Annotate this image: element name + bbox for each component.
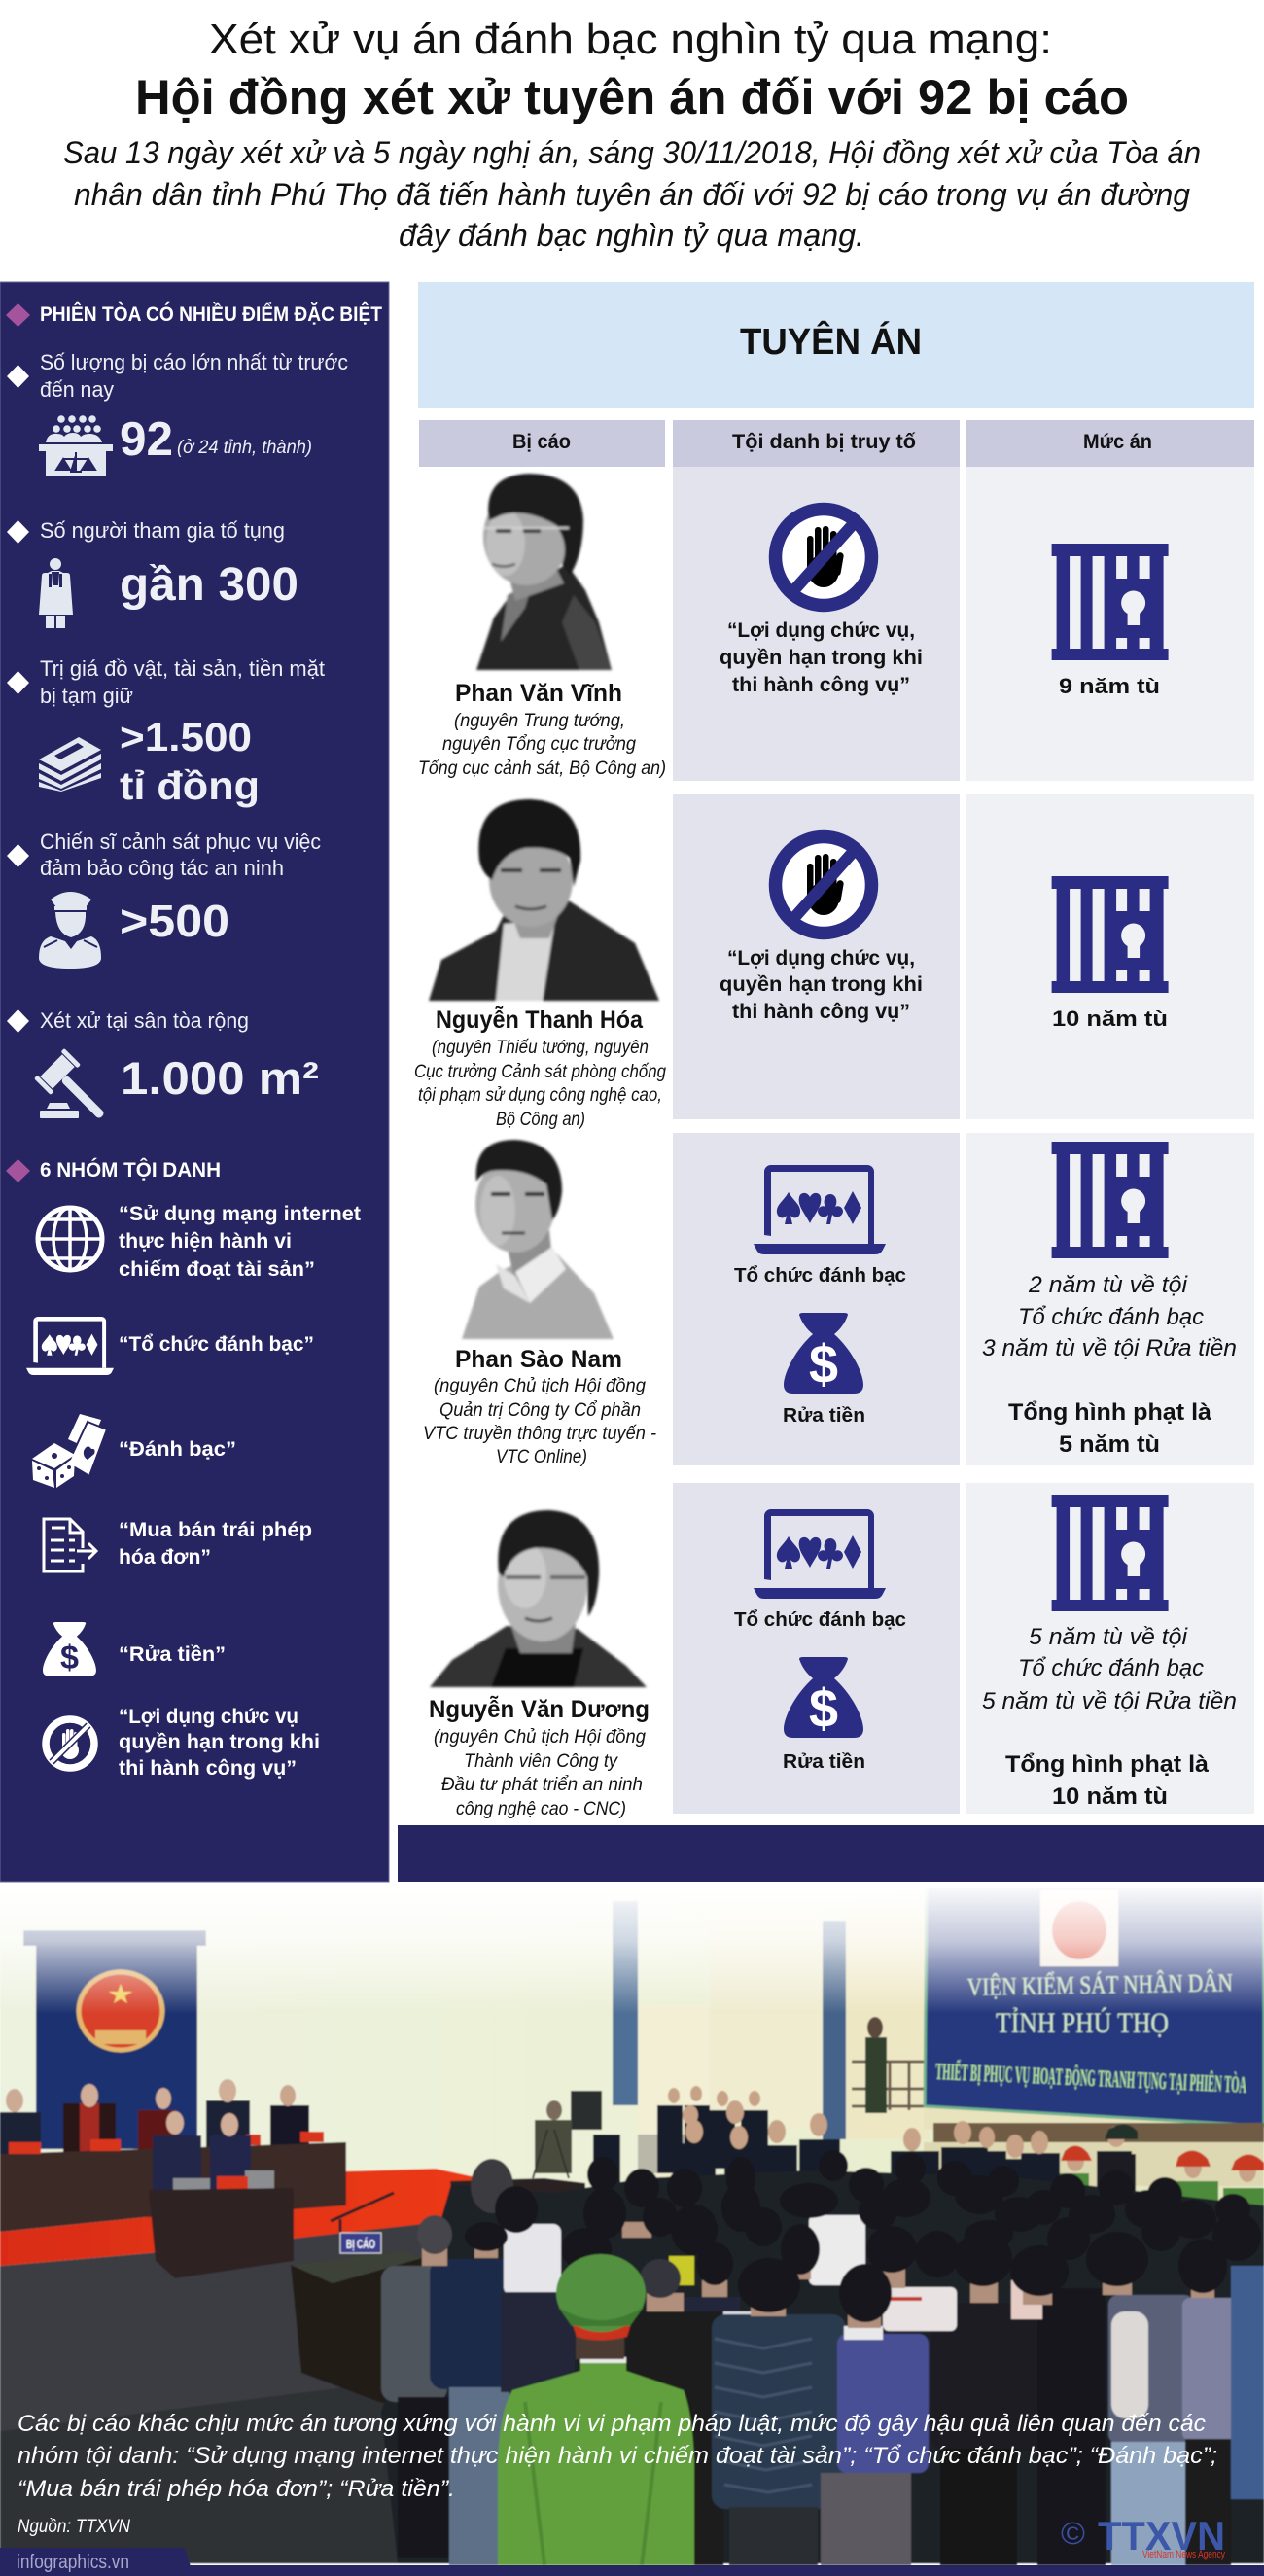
floor bbox=[0, 2220, 457, 2563]
row: Nguyễn Thanh Hóa bbox=[414, 794, 1254, 1130]
description bbox=[434, 1727, 646, 1819]
charge: internet: chiếm đoạt tài sản” bbox=[119, 1258, 315, 1281]
description: (nguyên Chủ tịch Hội đồng bbox=[434, 1727, 646, 1747]
row: Nguyễn Văn Dương bbox=[429, 1483, 1254, 1819]
charge: đánh bạc: “Đánh bạc” bbox=[119, 1438, 236, 1461]
fact: số lượng bị cáo: Số lượng bị cáo lớn nhất từ trước bbox=[40, 350, 348, 374]
heading: phiên tòa: PHIÊN TÒA CÓ NHIỀU ĐIỂM ĐẶC BIỆT bbox=[40, 302, 382, 326]
description bbox=[414, 1038, 666, 1130]
row: Phan Văn Vĩnh bbox=[418, 467, 1254, 781]
icon: laptop cards bbox=[26, 1317, 114, 1375]
sentence cell bbox=[966, 467, 1254, 781]
sentence cell: 10 năm tù bbox=[1052, 1006, 1168, 1031]
carpet bbox=[0, 2169, 480, 2266]
website: infographics.vn bbox=[17, 2552, 129, 2573]
description: Thành viên Công ty bbox=[464, 1751, 618, 1772]
charge: internet bbox=[38, 1203, 361, 1281]
sentence cell: 9 năm tù bbox=[1059, 674, 1160, 698]
portrait: Nguyễn Văn Dương bbox=[430, 1510, 647, 1687]
fact: số lượng bị cáo bbox=[7, 350, 348, 476]
charge: rửa tiền: “Rửa tiền” bbox=[119, 1643, 226, 1666]
description: Đầu tư phát triển an ninh bbox=[441, 1775, 643, 1795]
footer band bbox=[0, 2548, 1264, 2576]
defendant podium bbox=[291, 2233, 422, 2412]
photo caption: “Mua bán trái phép hóa đơn”; “Rửa tiền”. bbox=[18, 2476, 455, 2502]
description: nguyên Tổng cục trưởng bbox=[442, 734, 636, 755]
title bbox=[135, 16, 1129, 124]
doorway and columns bbox=[613, 1901, 929, 2178]
charge cell: quyền hạn trong khi bbox=[720, 973, 923, 996]
description: (nguyên Trung tướng, bbox=[454, 711, 625, 731]
intro paragraph: Sau 13 ngày xét xử và 5 ngày nghị án, sáng 30/11/2018, Hội đồng xét xử của Tòa án bbox=[63, 135, 1201, 170]
charge: đánh bạc bbox=[32, 1414, 236, 1488]
source: Nguồn: TTXVN bbox=[18, 2517, 130, 2537]
photo caption: Các bị cáo khác chịu mức án tương xứng với hành vi vi phạm pháp luật, mức độ gây hậu quả liên quan đến các bbox=[18, 2411, 1206, 2437]
stat: 1.500 tỉ đồng: tỉ đồng bbox=[120, 763, 260, 808]
charge: tổ chức đánh bạc bbox=[26, 1317, 314, 1375]
charge cell: thi hành công vụ” bbox=[732, 674, 910, 696]
sentence cell: Tổng hình phạt là bbox=[1008, 1399, 1212, 1426]
charge cell bbox=[673, 1133, 960, 1465]
charge: hóa đơn: “Mua bán trái phép bbox=[119, 1519, 312, 1541]
charge: hóa đơn: hóa đơn” bbox=[119, 1546, 211, 1569]
policeman in green bbox=[498, 2254, 694, 2565]
name: Nguyễn Thanh Hóa bbox=[436, 1005, 644, 1034]
charge cell: Tổ chức đánh bạc bbox=[734, 1609, 906, 1631]
icon: invoice bbox=[44, 1519, 96, 1571]
sentence cell: 10 năm tù bbox=[1052, 1783, 1168, 1810]
second desk bbox=[450, 2178, 585, 2256]
icon: jail bbox=[1052, 1142, 1169, 1258]
title line 1: Xét xử vụ án đánh bạc nghìn tỷ qua mạng: bbox=[209, 16, 1052, 63]
emblem panel bbox=[23, 1930, 206, 2149]
officers at right bbox=[1060, 2124, 1264, 2227]
main bench bbox=[0, 2142, 346, 2232]
icon: courtroom defendants bbox=[39, 415, 113, 476]
logo: TTXVN: VietNam News Agency bbox=[1142, 2549, 1225, 2560]
charge cell bbox=[673, 467, 960, 781]
portrait: Phan Văn Vĩnh bbox=[476, 474, 612, 670]
icon: no hand bbox=[776, 510, 871, 605]
charge: internet: thực hiện hành vi bbox=[119, 1230, 292, 1253]
name: Phan Sào Nam bbox=[455, 1346, 622, 1373]
intro paragraph: nhân dân tỉnh Phú Thọ đã tiến hành tuyên án đối với 92 bị cáo trong vụ án đường bbox=[74, 177, 1190, 212]
clerk desk bbox=[149, 2188, 294, 2278]
table header: Tội danh bị truy tố bbox=[732, 431, 916, 453]
stat: 1000 m2: 1.000 m² bbox=[121, 1052, 319, 1104]
charge cell bbox=[673, 1483, 960, 1814]
crowd heads bbox=[417, 2150, 1261, 2322]
icon: gavel bbox=[34, 1048, 118, 1132]
icon: money bag: $ bbox=[809, 1333, 838, 1394]
photo: courtroom bbox=[0, 1883, 1264, 2565]
crowd mass bbox=[381, 2170, 1264, 2563]
icon: judge robe bbox=[39, 558, 73, 628]
charge cell: “Lợi dụng chức vụ, bbox=[727, 619, 915, 642]
description: Bộ Công an) bbox=[496, 1110, 585, 1130]
stat: 1.500 tỉ đồng: >1.500 bbox=[120, 715, 252, 759]
icon: globe bbox=[38, 1208, 102, 1270]
name: Phan Văn Vĩnh bbox=[455, 680, 622, 707]
row: Phan Sào Nam bbox=[423, 1133, 1254, 1467]
top fade bbox=[0, 1883, 1264, 2014]
stat: gần 300: gần 300 bbox=[120, 559, 298, 611]
icon: money bag bbox=[43, 1622, 96, 1676]
icon: jail bbox=[1052, 1495, 1169, 1611]
description: công nghệ cao - CNC) bbox=[456, 1799, 626, 1819]
charge cell: Rửa tiền bbox=[783, 1405, 865, 1427]
charge: hóa đơn bbox=[44, 1519, 312, 1571]
fact: số người tham gia bbox=[7, 518, 298, 628]
fact: trị giá tài sản bbox=[7, 656, 325, 808]
band: bottom of table bbox=[398, 1825, 1264, 1882]
charge: tổ chức đánh bạc: “Tổ chức đánh bạc” bbox=[119, 1333, 314, 1356]
panel: left sidebar bbox=[0, 282, 389, 1882]
description: (nguyên Chủ tịch Hội đồng bbox=[434, 1376, 646, 1396]
judges bbox=[0, 2079, 309, 2162]
charge: lợi dụng chức vụ bbox=[46, 1706, 320, 1780]
title line 2: Hội đồng xét xử tuyên án đối với 92 bị cáo bbox=[135, 70, 1129, 124]
icon: police officer bbox=[39, 892, 101, 969]
fact: chiến sĩ cảnh sát: đảm bảo công tác an ninh bbox=[40, 856, 284, 880]
sentence cell bbox=[966, 794, 1254, 1119]
icon: money stack bbox=[39, 737, 101, 792]
description: Cục trưởng Cảnh sát phòng chống bbox=[414, 1062, 666, 1082]
sentence cell bbox=[966, 1133, 1254, 1465]
charge cell: Tổ chức đánh bạc bbox=[734, 1265, 906, 1287]
icon: jail bbox=[1052, 876, 1169, 993]
charge cell: “Lợi dụng chức vụ, bbox=[727, 947, 915, 970]
railing bbox=[852, 2062, 924, 2110]
clerks bbox=[153, 2111, 274, 2196]
description: VTC Online) bbox=[496, 1447, 587, 1467]
fact: trị giá tài sản: Trị giá đồ vật, tài sản, tiền mặt bbox=[40, 656, 325, 681]
icon: stop hand bbox=[46, 1719, 94, 1768]
microphone bbox=[331, 2193, 394, 2233]
sentence cell: 5 năm tù về tội Rửa tiền bbox=[982, 1688, 1237, 1714]
sentence cell: Tổ chức đánh bạc bbox=[1018, 1655, 1204, 1681]
fact: số lượng bị cáo: đến nay bbox=[40, 377, 114, 402]
front clothing bbox=[381, 2215, 1264, 2565]
charge cell bbox=[673, 794, 960, 1119]
icon: money bag: $ bbox=[60, 1640, 79, 1676]
fact: sân tòa bbox=[7, 1008, 319, 1132]
charge cell: Rửa tiền bbox=[783, 1751, 865, 1773]
portrait: Phan Sào Nam bbox=[462, 1140, 614, 1339]
sentence cell: Tổng hình phạt là bbox=[1005, 1751, 1210, 1778]
table header bbox=[419, 420, 1254, 467]
logo: TTXVN: TTXVN bbox=[1098, 2513, 1225, 2558]
icon: money bag: $ bbox=[809, 1677, 838, 1739]
charge: lợi dụng chức vụ: quyền hạn trong khi bbox=[119, 1731, 320, 1753]
photo caption: nhóm tội danh: “Sử dụng mạng internet thực hiện hành vi chiếm đoạt tài sản”; “Tổ chức đánh bạc”; “Đánh bạc”; bbox=[18, 2443, 1217, 2469]
description: (nguyên Thiếu tướng, nguyên bbox=[432, 1038, 649, 1058]
icon: laptop cards bbox=[754, 1165, 886, 1254]
description: Tổng cục cảnh sát, Bộ Công an) bbox=[418, 759, 666, 779]
fact: chiến sĩ cảnh sát bbox=[7, 829, 321, 969]
charge: internet: “Sử dụng mạng internet bbox=[119, 1203, 361, 1225]
icon: laptop cards bbox=[754, 1509, 886, 1599]
back standing people bbox=[593, 2105, 1132, 2204]
defendant podium: BỊ CÁO bbox=[346, 2237, 375, 2251]
sentence cell: 5 năm tù về tội bbox=[1029, 1624, 1188, 1650]
fact: trị giá tài sản: bị tạm giữ bbox=[40, 684, 133, 708]
heading: 6 nhóm tội danh: 6 NHÓM TỘI DANH bbox=[40, 1158, 221, 1182]
stat: 500: >500 bbox=[120, 896, 229, 946]
note: 24 tỉnh thành: (ở 24 tỉnh, thành) bbox=[177, 438, 312, 458]
icon: money bag bbox=[784, 1657, 863, 1739]
intro paragraph: đây đánh bạc nghìn tỷ qua mạng. bbox=[399, 218, 864, 253]
charge cell: quyền hạn trong khi bbox=[720, 647, 923, 669]
banner: tuyên án: TUYÊN ÁN bbox=[740, 320, 922, 363]
intro paragraph bbox=[63, 135, 1201, 253]
name: Nguyễn Văn Dương bbox=[429, 1694, 650, 1723]
charge: lợi dụng chức vụ: thi hành công vụ” bbox=[119, 1757, 297, 1780]
description: VTC truyền thông trực tuyến - bbox=[423, 1424, 656, 1444]
icon: no hand bbox=[776, 836, 871, 934]
charge: rửa tiền bbox=[43, 1622, 226, 1676]
photo caption bbox=[18, 2411, 1217, 2502]
icon: dice and cards bbox=[32, 1414, 107, 1488]
fact: chiến sĩ cảnh sát: Chiến sĩ cảnh sát phục vụ việc bbox=[40, 829, 321, 854]
sentence cell: Tổ chức đánh bạc bbox=[1018, 1304, 1204, 1330]
description bbox=[423, 1376, 656, 1467]
fact: số người tham gia: Số người tham gia tố tụng bbox=[40, 518, 285, 543]
description bbox=[418, 711, 666, 779]
sentence cell bbox=[966, 1483, 1254, 1814]
stat: 92: 92 bbox=[120, 413, 173, 466]
stat: 1.500 tỉ đồng bbox=[120, 715, 260, 808]
charge: lợi dụng chức vụ: “Lợi dụng chức vụ bbox=[119, 1706, 298, 1728]
fact: sân tòa: Xét xử tại sân tòa rộng bbox=[40, 1008, 249, 1033]
description: tội phạm sử dụng công nghệ cao, bbox=[418, 1085, 662, 1106]
icon: money bag bbox=[784, 1313, 863, 1394]
logo: TTXVN: © bbox=[1061, 2516, 1085, 2551]
banner: TỈNH PHÚ THỌ bbox=[996, 2007, 1169, 2039]
icon: jail bbox=[1052, 544, 1169, 660]
description: Quản trị Công ty Cổ phần bbox=[439, 1400, 641, 1421]
banner bbox=[924, 1887, 1264, 2130]
sentence cell: 5 năm tù bbox=[1059, 1431, 1160, 1458]
table header: Mức án bbox=[1083, 431, 1152, 453]
portrait: Nguyễn Thanh Hóa bbox=[429, 799, 659, 1001]
banner: tuyên án bbox=[418, 282, 1254, 408]
sentence cell: 2 năm tù về tội bbox=[1028, 1272, 1188, 1298]
crowd necks bbox=[422, 2222, 1214, 2328]
back faces bbox=[668, 2086, 1256, 2182]
sentence cell: 3 năm tù về tội Rửa tiền bbox=[982, 1335, 1237, 1361]
speaker and camera bbox=[533, 2091, 602, 2178]
charge cell: thi hành công vụ” bbox=[732, 1001, 910, 1023]
table header: Bị cáo bbox=[512, 431, 571, 453]
